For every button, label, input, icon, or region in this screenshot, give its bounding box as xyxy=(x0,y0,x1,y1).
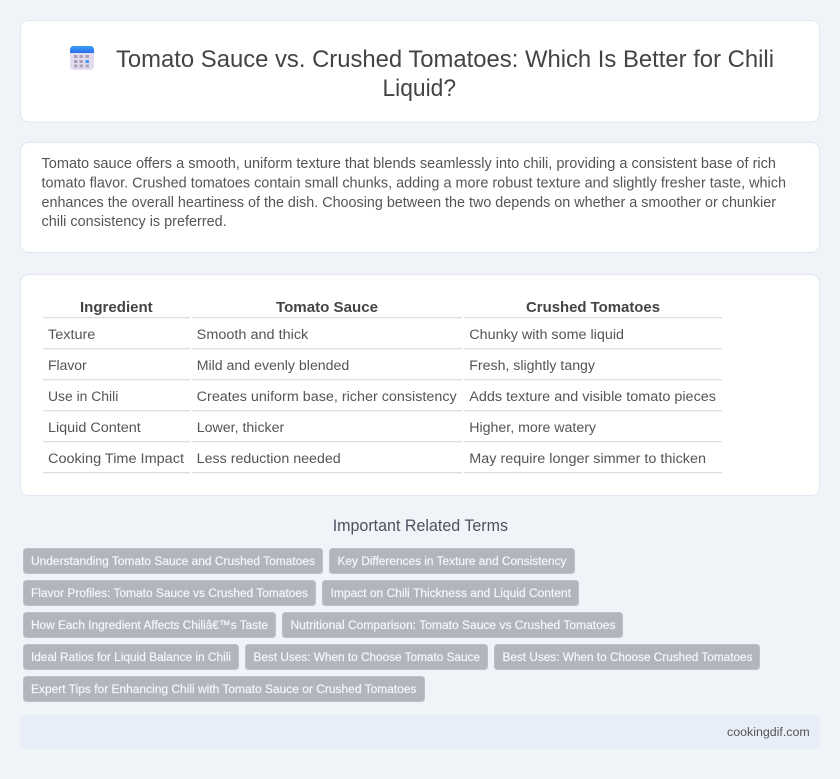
table header: Tomato Sauce xyxy=(276,300,378,316)
table row: liquid content xyxy=(48,420,597,436)
panel: related term tags: How Each Ingredient Affects Chiliâ€™s Taste xyxy=(31,618,268,632)
panel: related term tags: Ideal Ratios for Liquid Balance in Chili xyxy=(31,650,231,664)
footer xyxy=(20,715,820,749)
panel: introduction xyxy=(20,142,820,252)
table row: liquid content: Liquid Content xyxy=(48,420,141,436)
text block: introduction paragraph: enhances the overall heartiness of the dish. Choosing between the two depends on whether a smoother or chunkier xyxy=(42,195,776,211)
table header: Crushed Tomatoes xyxy=(526,300,660,316)
panel: related term tags: Flavor Profiles: Tomato Sauce vs Crushed Tomatoes xyxy=(31,586,308,600)
title xyxy=(116,46,774,102)
panel: related term tags: Understanding Tomato Sauce and Crushed Tomatoes xyxy=(31,554,315,568)
text block: introduction paragraph: tomato flavor. Crushed tomatoes contain small chunks, adding a more robust texture and slightly fresher taste, which xyxy=(42,175,786,191)
text block: introduction paragraph: Tomato sauce offers a smooth, uniform texture that blends seamlessly into chili, providing a consistent base of rich xyxy=(42,156,776,172)
heading: important related terms: Important Related Terms xyxy=(333,517,508,535)
table row: flavor: Fresh, slightly tangy xyxy=(469,358,596,374)
table row: use in chili: Creates uniform base, richer consistency xyxy=(197,389,458,405)
panel: related term tags: Expert Tips for Enhancing Chili with Tomato Sauce or Crushed Tomatoes xyxy=(31,682,416,696)
title: Liquid? xyxy=(382,75,456,102)
table row: texture: Texture xyxy=(48,327,95,343)
table row: cooking time impact: Cooking Time Impact xyxy=(48,451,184,467)
panel: title card xyxy=(20,20,820,122)
panel: related term tags: Impact on Chili Thickness and Liquid Content xyxy=(330,586,572,600)
table row: use in chili xyxy=(48,389,716,405)
icon: calendar xyxy=(70,46,94,70)
panel: comparison table xyxy=(20,274,820,496)
text block: introduction paragraph: chili consistency is preferred. xyxy=(42,214,227,230)
panel: related term tags: Nutritional Comparison: Tomato Sauce vs Crushed Tomatoes xyxy=(290,618,616,632)
footer: cookingdif.com xyxy=(727,725,810,739)
table row: use in chili: Adds texture and visible tomato pieces xyxy=(469,389,716,405)
table row: liquid content: Lower, thicker xyxy=(197,420,285,436)
table row: flavor: Flavor xyxy=(48,358,87,374)
panel: related term tags: Best Uses: When to Choose Tomato Sauce xyxy=(254,650,480,664)
table header: Ingredient xyxy=(80,300,153,316)
text block: introduction paragraph xyxy=(42,156,786,230)
table row: liquid content: Higher, more watery xyxy=(469,420,597,436)
table row: texture: Chunky with some liquid xyxy=(469,327,624,343)
title: Tomato Sauce vs. Crushed Tomatoes: Which Is Better for Chili xyxy=(116,46,774,73)
table row: cooking time impact xyxy=(48,451,706,467)
table row: use in chili: Use in Chili xyxy=(48,389,118,405)
table row: flavor xyxy=(48,358,596,374)
panel: related term tags: Best Uses: When to Choose Crushed Tomatoes xyxy=(502,650,752,664)
table header xyxy=(80,300,660,316)
table row: texture: Smooth and thick xyxy=(197,327,309,343)
table row: cooking time impact: May require longer simmer to thicken xyxy=(469,451,706,467)
panel: related term tags xyxy=(24,548,760,702)
table row: flavor: Mild and evenly blended xyxy=(197,358,349,374)
table row: cooking time impact: Less reduction needed xyxy=(197,451,341,467)
panel: related term tags: Key Differences in Texture and Consistency xyxy=(338,554,567,568)
table row: texture xyxy=(48,327,624,343)
